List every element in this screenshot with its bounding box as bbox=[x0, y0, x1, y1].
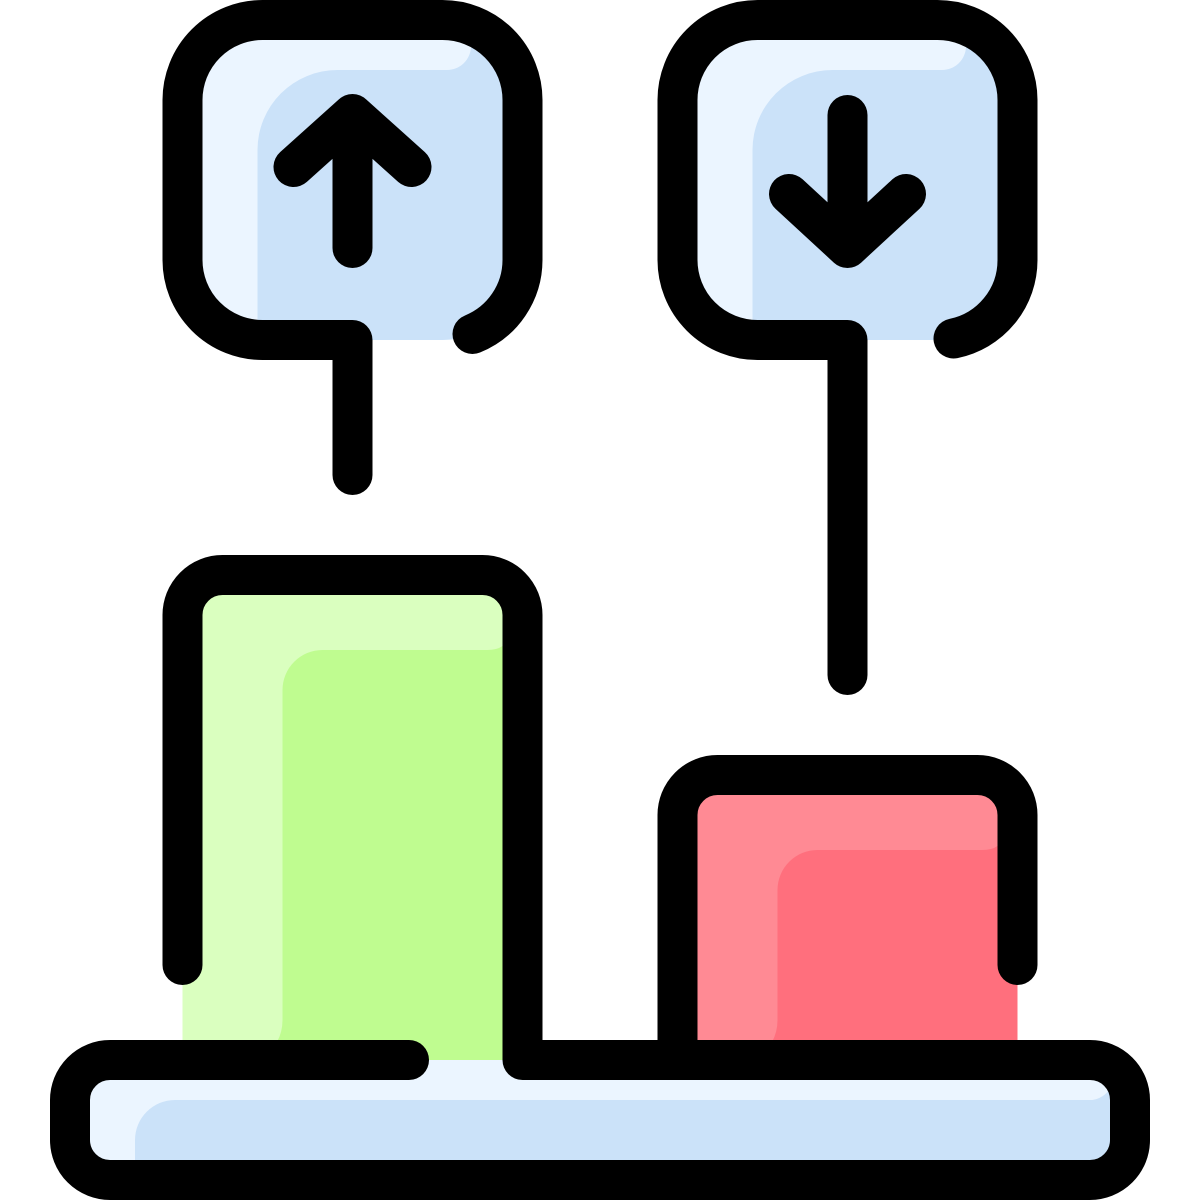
short red bar fill bbox=[678, 775, 1018, 1060]
tall green bar fill bbox=[182, 575, 522, 1060]
bubble fill: down bbox=[678, 20, 1018, 340]
base platform fill bbox=[70, 1060, 1130, 1180]
bubble outline: down bbox=[678, 20, 1018, 675]
icon: down arrow bbox=[789, 115, 906, 248]
bubble fill: up bbox=[182, 20, 523, 340]
panel: down arrow speech bubble bbox=[678, 20, 1018, 675]
icon: up arrow bbox=[294, 114, 412, 248]
outline: green bar and base bbox=[70, 575, 1130, 1180]
outline: red bar bbox=[678, 775, 1018, 1060]
bubble outline: up bbox=[182, 20, 522, 475]
panel: up arrow speech bubble bbox=[182, 20, 523, 475]
bar chart: bars on base bbox=[70, 575, 1130, 1180]
